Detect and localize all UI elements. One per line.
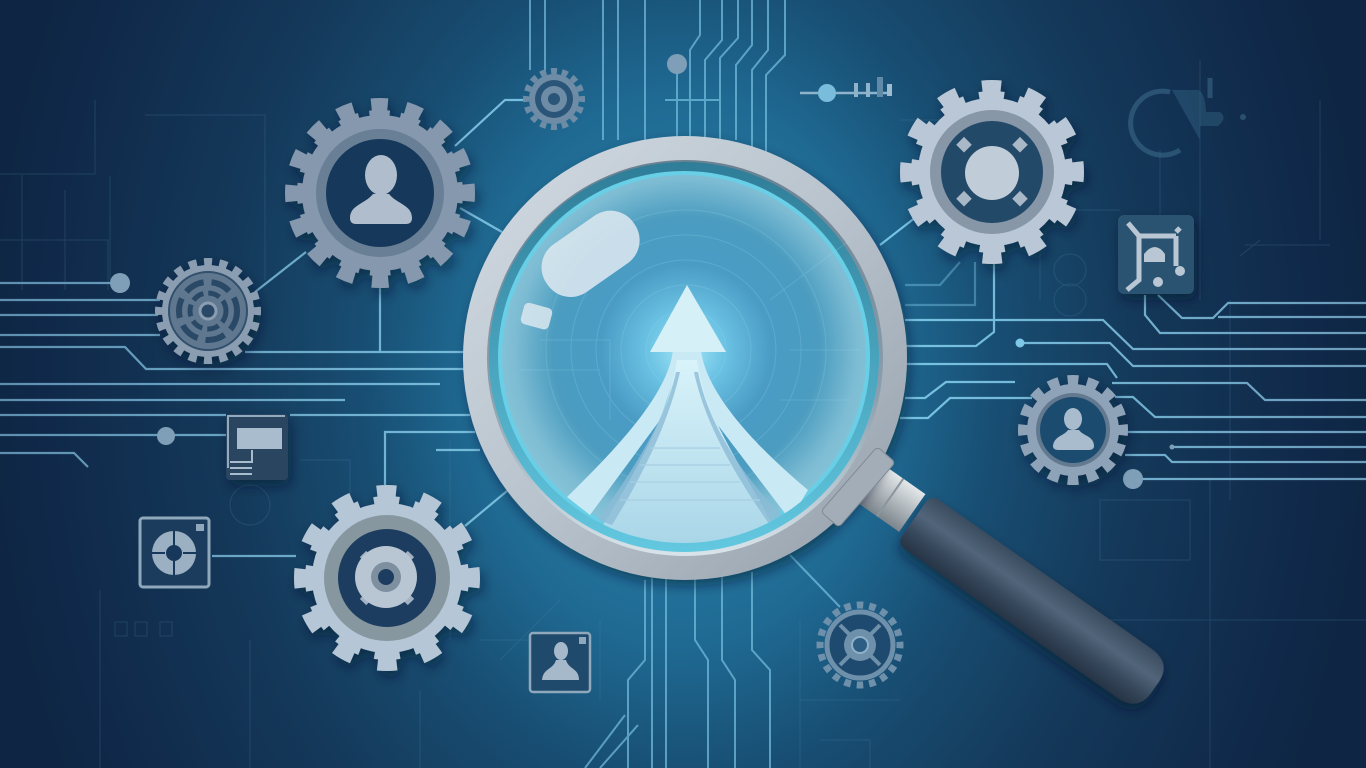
circuit lines: bottom centre: [585, 555, 840, 768]
lens glass: [489, 162, 879, 552]
gear: small top centre: [526, 71, 582, 127]
lens road with arrow: [567, 350, 808, 545]
handle collar: [821, 447, 895, 527]
icon: window box left: [226, 414, 288, 480]
gear: top left with person: [293, 106, 467, 280]
handle grip: [897, 494, 1172, 712]
gear: small concentric left: [159, 262, 257, 360]
icon: person: [350, 155, 412, 224]
circuit lines: right side: [880, 210, 1366, 479]
arrow head: [650, 285, 726, 352]
handle metal neck: [855, 463, 925, 532]
icon: person: [1053, 408, 1094, 450]
lens highlight large: [531, 200, 651, 308]
gear: right with person: [1023, 380, 1123, 480]
circuit lines: top centre: [530, 0, 785, 160]
faint ghost emblem top right: [1131, 78, 1246, 155]
gear: small bottom right: [820, 605, 900, 685]
circuit lines: left side: [0, 100, 526, 556]
magnifying glass: [463, 136, 1172, 712]
icon: target box: [140, 518, 209, 587]
icon: slider bars top right: [800, 77, 892, 102]
gear spokes: [363, 554, 411, 602]
gear: top right: [908, 88, 1076, 256]
icon: person box bottom: [530, 633, 590, 692]
lens ring: [463, 136, 907, 580]
icon: image frame box right: [1118, 215, 1194, 294]
gear: bottom left: [302, 493, 472, 663]
gear spokes: [956, 137, 1028, 206]
circuit node dots: [110, 54, 1174, 489]
lens highlight small: [520, 302, 553, 331]
